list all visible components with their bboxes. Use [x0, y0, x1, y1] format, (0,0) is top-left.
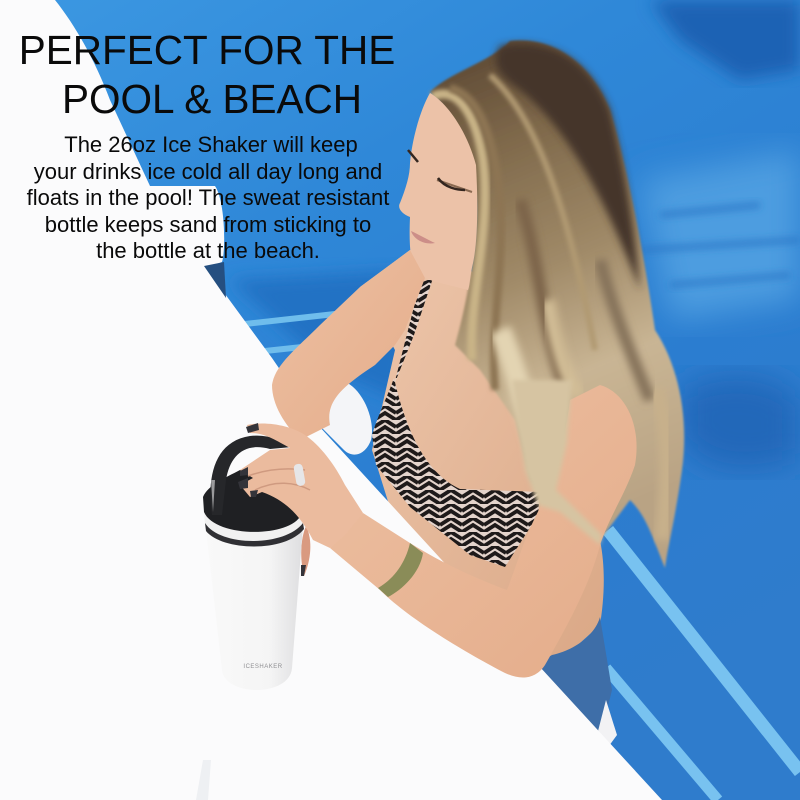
description text: bottle keeps sand from sticking to — [45, 212, 371, 237]
shaker bottle — [203, 436, 304, 690]
description text: the bottle at the beach. — [96, 238, 320, 263]
nails — [238, 423, 259, 497]
title: POOL & BEACH — [62, 76, 362, 122]
title — [19, 27, 395, 122]
ring — [293, 463, 306, 487]
lid — [203, 470, 301, 532]
handle — [210, 436, 292, 515]
description text: The 26oz Ice Shaker will keep — [64, 132, 358, 157]
hand — [238, 423, 363, 548]
nail behind bottle — [301, 565, 306, 576]
bottle body — [206, 526, 303, 690]
bikini top — [372, 278, 540, 567]
blond hair strand over arm — [512, 380, 602, 545]
float piece under jeans — [597, 700, 617, 750]
white pool float tube — [318, 380, 372, 455]
face — [399, 93, 477, 290]
brand text: ICESHAKER — [243, 664, 283, 670]
jeans — [530, 617, 612, 735]
wristband — [378, 543, 423, 597]
lips — [411, 231, 435, 243]
torso — [360, 250, 620, 670]
silver collar — [204, 510, 303, 543]
handle highlight — [211, 480, 215, 512]
pool lane lines — [245, 314, 800, 800]
dark ring — [205, 523, 304, 546]
description text — [27, 132, 389, 263]
hair — [430, 40, 684, 568]
description text: floats in the pool! The sweat resistant — [27, 185, 389, 210]
title: PERFECT FOR THE — [19, 27, 395, 73]
torso and jeans behind the platform — [360, 250, 620, 750]
finger behind bottle — [301, 526, 310, 576]
woman — [272, 40, 684, 678]
description text: your drinks ice cold all day long and — [34, 159, 382, 184]
eye and brow — [408, 150, 472, 192]
shoulder and neck left arm — [272, 250, 425, 440]
right arm — [330, 385, 637, 678]
finger lines — [248, 469, 310, 490]
